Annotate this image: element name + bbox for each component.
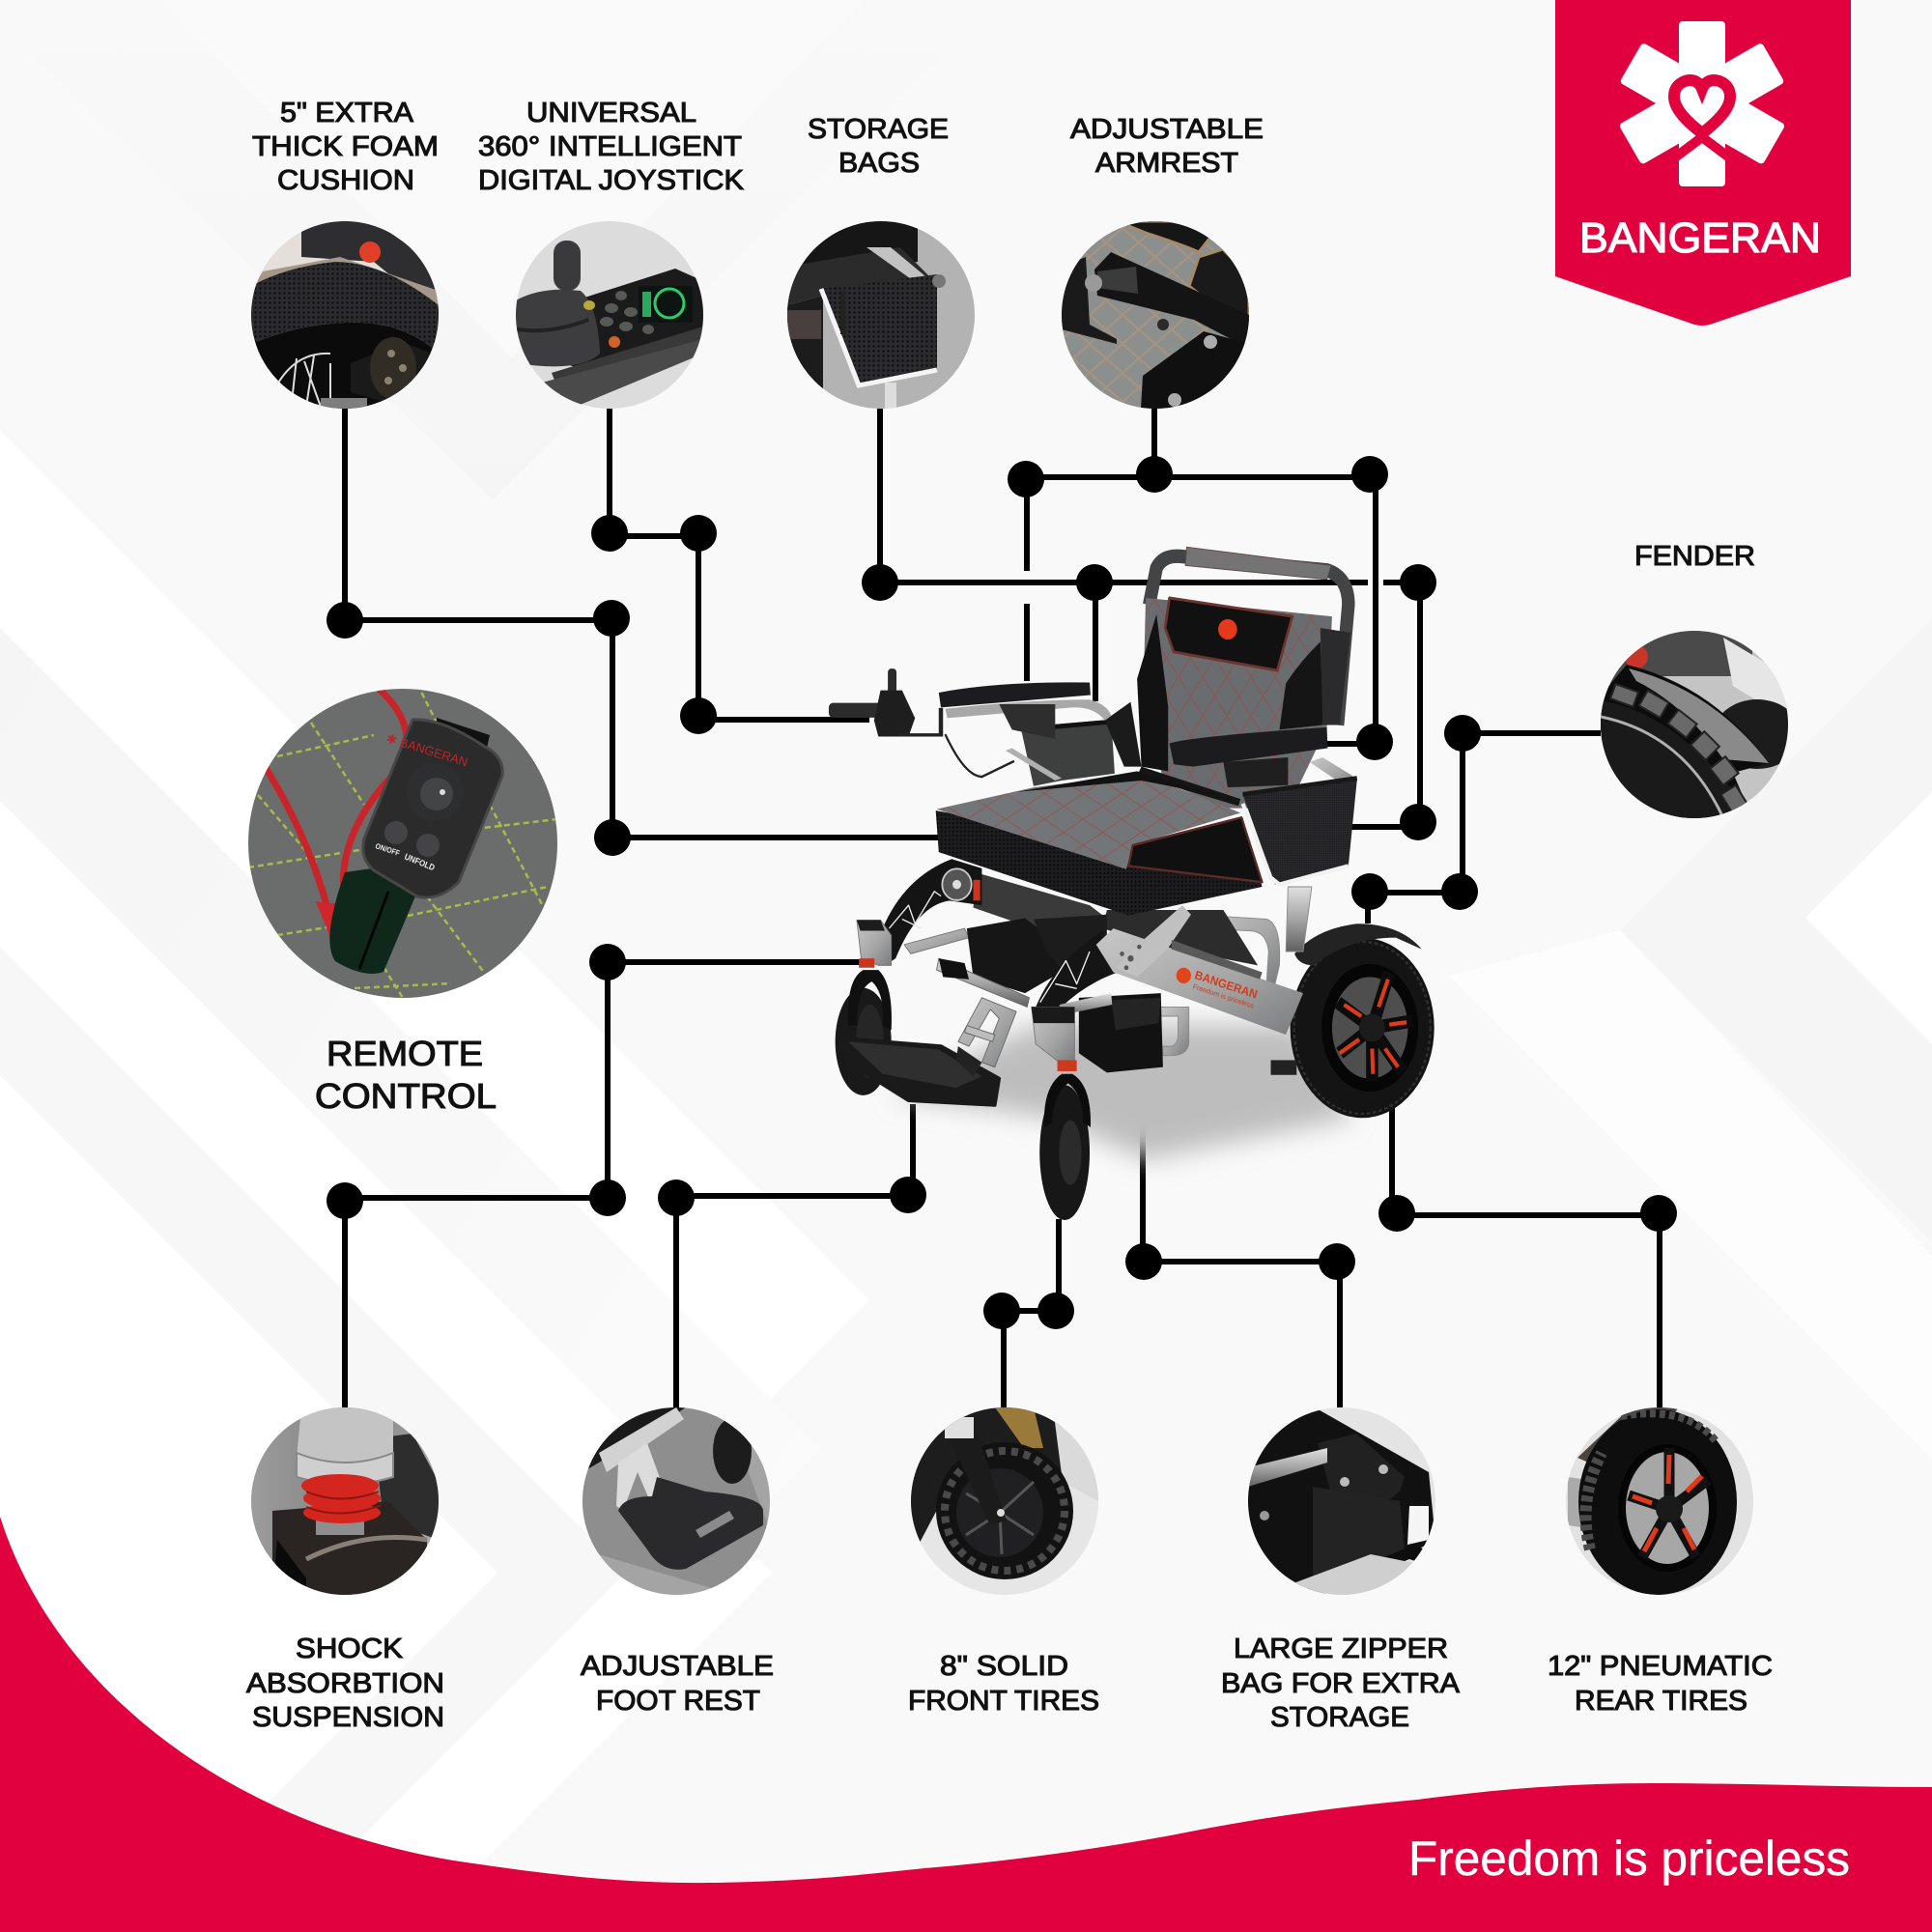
label: storage bags: BAGS [838, 148, 920, 179]
front caster [1039, 1074, 1091, 1220]
connector lines [345, 409, 1660, 1407]
fender [1294, 923, 1422, 965]
connector dots [327, 456, 1677, 1329]
label: zipper bag: LARGE ZIPPER [1234, 1634, 1448, 1664]
label: armrest [1070, 114, 1264, 179]
front arc [1036, 930, 1118, 1007]
label: cushion: 5" EXTRA [280, 98, 414, 128]
photo: front tire [911, 1407, 1098, 1595]
right storage basket [1242, 779, 1357, 885]
label: cushion: THICK FOAM [252, 131, 439, 162]
seat cushion [936, 771, 1263, 916]
label: foot rest [581, 1651, 774, 1717]
label: remote control: REMOTE [327, 1034, 483, 1073]
panel: zipper bag [1221, 1407, 1461, 1733]
label: foot rest: ADJUSTABLE [581, 1651, 774, 1682]
photo: cushion [251, 221, 439, 410]
label: rear tires: 12" PNEUMATIC [1548, 1651, 1773, 1682]
remote logo text: ✱ BANGERAN [384, 731, 469, 769]
top grip [1185, 547, 1331, 580]
wheelchair illustration [829, 547, 1435, 1220]
panel: fender [1601, 541, 1801, 818]
photo: remote control: UNFOLD [403, 852, 437, 872]
rear support post [1286, 887, 1312, 952]
photo: zipper bag [1248, 1407, 1435, 1595]
label: front tires: FRONT TIRES [908, 1686, 1099, 1717]
label: cushion: CUSHION [277, 165, 414, 196]
label: suspension: ABSORBTION [246, 1668, 444, 1699]
front caster post [1032, 1007, 1077, 1071]
label: joystick: DIGITAL JOYSTICK [478, 165, 745, 196]
label: front tires: 8" SOLID [940, 1651, 1068, 1682]
brand name: BANGERAN [1579, 214, 1821, 262]
bracket tube [1161, 1007, 1189, 1056]
under seat housing [973, 873, 1120, 928]
label: zipper bag: BAG FOR EXTRA [1221, 1668, 1461, 1699]
remote button text: ON/OFF [374, 841, 401, 858]
panel: joystick [478, 98, 745, 409]
label: suspension: SUSPENSION [252, 1702, 444, 1733]
panel: rear tires [1548, 1407, 1773, 1717]
rear wheel [1291, 938, 1435, 1118]
label: rear tires: REAR TIRES [1575, 1686, 1747, 1717]
right armrest [1170, 727, 1352, 790]
label: rear tires [1548, 1651, 1773, 1717]
label: suspension [246, 1634, 444, 1733]
footrest assembly [841, 958, 1030, 1105]
label: joystick [478, 98, 745, 196]
icon: medical star with heart [1619, 21, 1785, 186]
photo: storage bag [787, 221, 975, 409]
logo badge [1555, 0, 1851, 326]
photo: rear tire [1566, 1407, 1753, 1595]
panel: armrest [1062, 114, 1264, 409]
label: remote control: CONTROL [315, 1076, 497, 1116]
photo: remote control [248, 684, 557, 998]
label: zipper bag [1221, 1634, 1461, 1733]
photo: fender [1601, 631, 1801, 818]
kick stand [1271, 1060, 1296, 1075]
left side frame arc [857, 859, 981, 968]
label: zipper bag: STORAGE [1270, 1702, 1409, 1733]
folded left basket [1021, 720, 1115, 786]
photo: armrest [1062, 221, 1249, 409]
label: storage bags [808, 114, 949, 179]
label: joystick: 360° INTELLIGENT [478, 131, 742, 162]
seat back frame [1150, 556, 1349, 725]
left armrest with joystick [829, 668, 1111, 777]
label: armrest: ARMREST [1095, 148, 1238, 179]
motor block [1034, 915, 1107, 977]
photo: suspension [251, 1407, 439, 1595]
lower zipper bag [1079, 993, 1163, 1072]
panel: front tires [908, 1407, 1099, 1717]
label: cushion [252, 98, 439, 196]
label: fender: FENDER [1634, 541, 1755, 572]
label: remote control [315, 1034, 497, 1116]
tagline: Freedom is priceless [1408, 1832, 1850, 1886]
panel: foot rest [581, 1407, 774, 1717]
panel: storage bags [787, 114, 975, 409]
floor shadow [892, 1026, 1352, 1159]
photo: joystick [516, 221, 703, 409]
label: suspension: SHOCK [296, 1634, 404, 1664]
silver main beam [1096, 905, 1303, 1035]
label: storage bags: STORAGE [808, 114, 949, 145]
label: joystick: UNIVERSAL [526, 98, 696, 128]
label: armrest: ADJUSTABLE [1070, 114, 1264, 145]
panel: 5 inch cushion [251, 98, 439, 410]
front left wheel [836, 970, 892, 1095]
back strap [1105, 702, 1142, 767]
photo: foot rest [582, 1407, 770, 1595]
silver main beam: BANGERAN [1193, 968, 1259, 1002]
bottom red wave [0, 1517, 1932, 1932]
seat back panel [1137, 598, 1350, 809]
under seat storage bag [967, 919, 1077, 993]
label: front tires [908, 1651, 1099, 1717]
panel: remote control [248, 684, 557, 1116]
silver main beam: Freedom is priceless [1192, 981, 1255, 1010]
label: foot rest: FOOT REST [596, 1686, 760, 1717]
panel: suspension [246, 1407, 444, 1733]
